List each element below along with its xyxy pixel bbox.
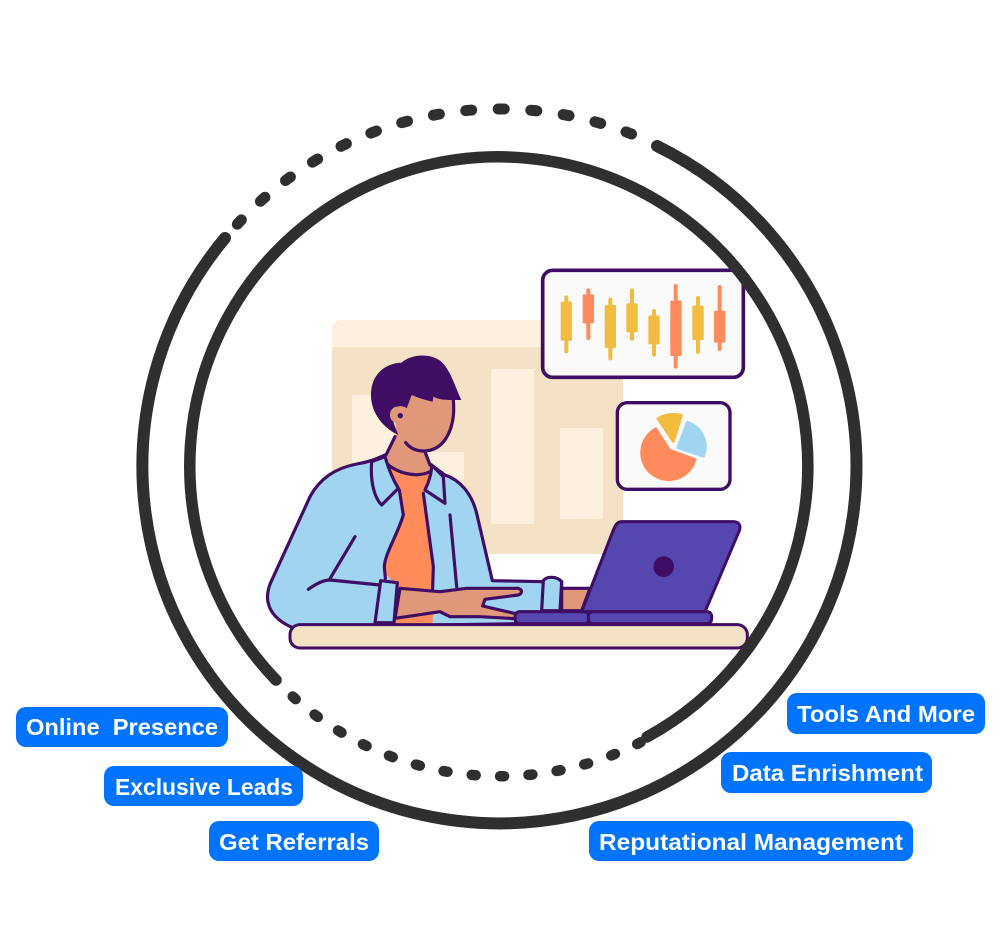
right cuff xyxy=(542,577,562,611)
label: Reputational Management xyxy=(589,821,913,861)
label: Exclusive Leads: Exclusive Leads xyxy=(115,774,293,800)
jacket lines xyxy=(308,490,457,589)
candlestick chart card xyxy=(543,270,743,377)
label: Online Presence: Online Presence xyxy=(26,714,218,740)
label: Data Enrishment: Data Enrishment xyxy=(732,760,923,786)
desk xyxy=(290,625,747,648)
inner ring xyxy=(190,157,808,776)
candle 6 xyxy=(670,284,682,369)
laptop screen xyxy=(582,522,740,612)
candle 7 xyxy=(692,296,704,354)
pie chart card xyxy=(617,403,730,489)
right forearm xyxy=(562,588,590,611)
hair xyxy=(371,356,461,435)
trackpad xyxy=(515,612,589,624)
desk and laptop xyxy=(290,522,747,648)
label: Get Referrals: Get Referrals xyxy=(219,829,369,855)
candle 4 xyxy=(626,288,638,341)
candle 5 xyxy=(648,309,660,357)
illustration: analyst at laptop xyxy=(268,270,747,648)
pie slice: orange xyxy=(641,428,696,481)
label: Reputational Management: Reputational Management xyxy=(599,829,903,855)
laptop base xyxy=(588,612,712,624)
label: Tools And More: Tools And More xyxy=(797,701,975,727)
left collar xyxy=(371,457,398,505)
label: Tools And More xyxy=(787,693,985,734)
candle 1 xyxy=(561,295,572,353)
label: Online Presence xyxy=(16,707,228,747)
candle 2 xyxy=(583,288,594,340)
candle 3 xyxy=(605,298,616,360)
jacket xyxy=(268,455,562,627)
neck xyxy=(385,433,431,477)
left cuff xyxy=(375,581,397,623)
left hand xyxy=(395,588,521,619)
label: Get Referrals xyxy=(209,821,379,861)
background board with bars xyxy=(332,320,623,554)
ear xyxy=(390,407,407,424)
candle 8 xyxy=(714,285,725,351)
t-shirt xyxy=(385,468,433,623)
face xyxy=(393,387,454,451)
pie slice: yellow xyxy=(658,415,681,441)
laptop logo xyxy=(653,556,674,577)
label: Exclusive Leads xyxy=(104,766,303,806)
right collar xyxy=(425,465,445,503)
outer ring xyxy=(142,109,856,823)
label: Data Enrishment xyxy=(721,752,932,793)
pie slice: blue xyxy=(678,422,705,456)
person xyxy=(268,356,590,627)
